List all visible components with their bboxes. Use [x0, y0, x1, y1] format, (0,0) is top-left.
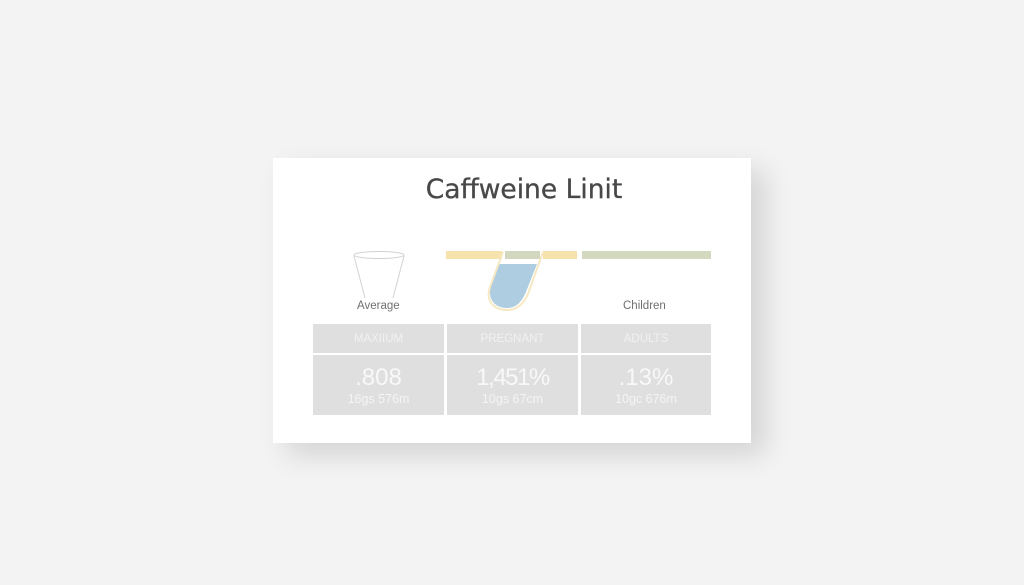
- title: Caffweine Linit: [426, 174, 622, 205]
- table column: adults: [581, 324, 711, 415]
- header: maxium: MAXIIUM: [354, 333, 403, 345]
- bar: green: [582, 251, 711, 259]
- header: adults: ADULTS: [624, 333, 668, 345]
- header: maxium: [313, 324, 444, 353]
- value: .808: .808: [355, 364, 402, 391]
- header: adults: [581, 324, 711, 353]
- value: .13%: .13%: [619, 364, 673, 391]
- value: .808: [313, 355, 444, 415]
- header: pregnant: [447, 324, 578, 353]
- chart: yellow bar and blue test tube: [446, 251, 577, 311]
- table column: pregnant: [447, 324, 578, 415]
- panel: caffeine limit card: [273, 158, 751, 443]
- value: 1,451%: 10gs 67cm: [482, 392, 543, 406]
- label: average: Average: [357, 300, 400, 312]
- icon: empty cup: [354, 251, 404, 298]
- header: pregnant: PREGNANT: [481, 333, 544, 345]
- value: 1,451%: [447, 355, 578, 415]
- value: .808: 16gs 576m: [348, 392, 409, 406]
- table column: maximum: [313, 324, 444, 415]
- value: .13%: [581, 355, 711, 415]
- label: children: Children: [623, 300, 666, 312]
- value: 1,451%: 1,451%: [476, 364, 549, 391]
- value: .13%: 10gc 676m: [615, 392, 677, 406]
